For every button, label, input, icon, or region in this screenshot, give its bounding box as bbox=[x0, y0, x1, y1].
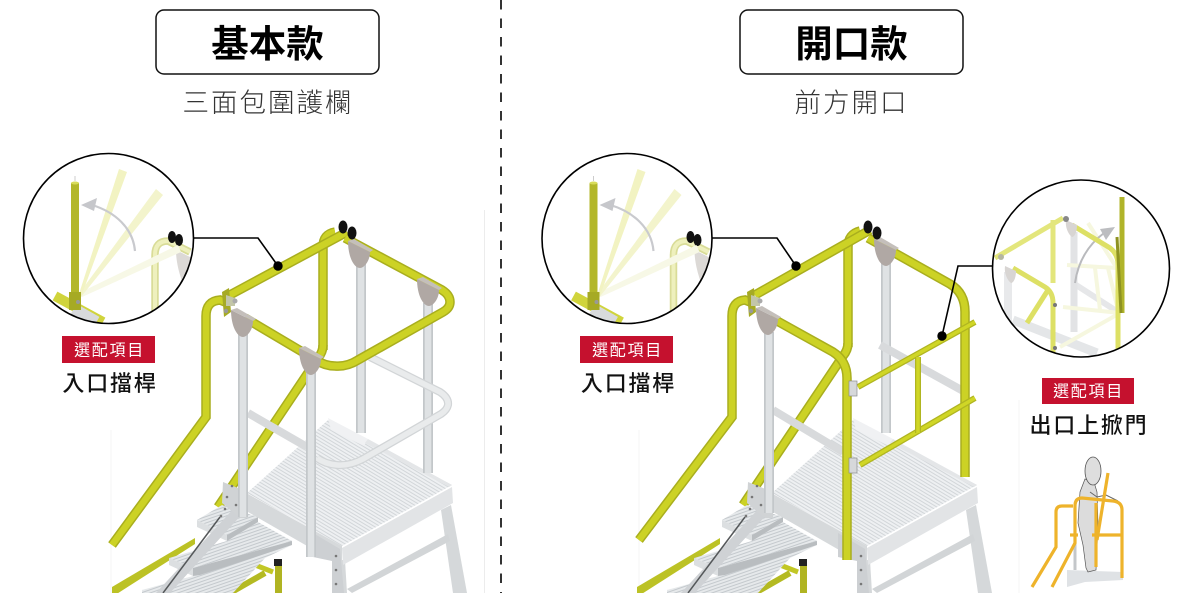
grey hubs bbox=[756, 237, 899, 335]
callout leader: right entry bar bbox=[712, 238, 801, 271]
heading: 基本款: 基本款 bbox=[211, 23, 324, 65]
label: 入口擋桿 basic: 入口擋桿 bbox=[62, 371, 158, 396]
entry bar clamp and knobs bbox=[747, 220, 882, 317]
platform, stairs and legs bbox=[112, 418, 467, 593]
tag: optional item, exit gate: 選配項目 bbox=[1053, 382, 1124, 400]
callout leader: left entry bar bbox=[193, 238, 283, 271]
heading: 開口款: 開口款 bbox=[795, 23, 908, 65]
callout circle: entry bar detail, open bbox=[542, 154, 714, 324]
tag: optional item, exit gate bbox=[1042, 378, 1134, 404]
panel: open-front platform illustration bbox=[637, 220, 992, 593]
tag: optional item, basic: 選配項目 bbox=[74, 342, 145, 360]
subheading: 前方開口: 前方開口 bbox=[794, 88, 908, 118]
top yellow handrail with uprights bbox=[755, 230, 965, 560]
entry bar clamp and knobs bbox=[222, 220, 356, 317]
label: 出口上掀門: 出口上掀門 bbox=[1029, 413, 1149, 438]
callout circle: exit gate detail bbox=[992, 180, 1170, 360]
left stair handrail bbox=[112, 300, 230, 545]
top yellow handrail ring bbox=[228, 232, 450, 366]
lift-up exit gate bbox=[849, 322, 975, 473]
heading: 開口款 bbox=[740, 10, 963, 74]
callout leader: exit gate bbox=[937, 266, 992, 341]
heading: 基本款 bbox=[156, 10, 379, 74]
aluminium posts and guard band bbox=[243, 263, 448, 557]
tag: optional item, open bbox=[580, 336, 673, 363]
rear handrail descending bbox=[743, 231, 860, 505]
tag: optional item, open: 選配項目 bbox=[592, 342, 663, 360]
label: 入口擋桿 open: 入口擋桿 bbox=[581, 371, 676, 396]
callout circle: entry bar detail, basic bbox=[24, 154, 196, 324]
tag: optional item, basic bbox=[62, 336, 155, 363]
subheading: 三面包圍護欄: 三面包圍護欄 bbox=[182, 88, 354, 118]
grey hubs bbox=[231, 239, 442, 375]
background frame lines bbox=[111, 210, 1019, 593]
platform, stairs and legs bbox=[637, 418, 992, 593]
left stair handrail bbox=[639, 300, 755, 540]
aluminium posts and back bars bbox=[769, 263, 965, 513]
panel: basic platform illustration bbox=[112, 220, 467, 593]
icon: person lifting exit gate bbox=[1032, 457, 1123, 587]
rear handrail descending bbox=[218, 232, 335, 507]
centre dashed divider bbox=[500, 0, 502, 593]
